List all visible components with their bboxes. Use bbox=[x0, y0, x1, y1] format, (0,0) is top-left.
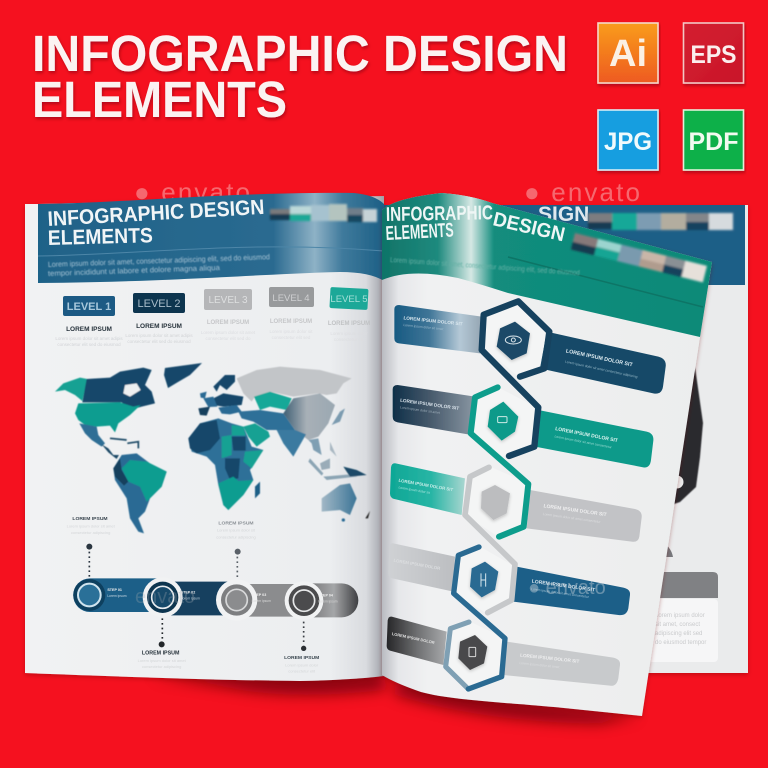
row 2: left bar: Lorem ipsum dolor sit amet bbox=[400, 405, 440, 415]
icon: PDF format badge: PDF bbox=[688, 128, 738, 156]
back page: black shape bbox=[668, 367, 703, 506]
level 4 tag: Lorem ipsum dolor sit bbox=[269, 329, 313, 334]
panel: back page (right, underneath): SIGN bbox=[538, 203, 589, 226]
timeline label 2: LOREM IPSUM bbox=[142, 651, 180, 657]
back page: grey box bbox=[655, 572, 718, 598]
left page header paragraph: tempor incididunt ut labore et dolore magna aliqua bbox=[48, 263, 221, 278]
Southeast Asia bbox=[308, 408, 367, 480]
row 2: right bar bbox=[535, 410, 653, 467]
row 1: right bar bbox=[540, 332, 666, 394]
timeline stage 1: Lorem ipsum bbox=[107, 594, 127, 598]
row 3: right bar bbox=[527, 490, 642, 542]
row 1 hex ring bbox=[482, 301, 549, 456]
book shadow bbox=[150, 672, 640, 724]
front page heading: INFOGRAPHIC bbox=[386, 202, 493, 226]
row 1: left bar: Lorem ipsum dolor sit amet bbox=[403, 323, 444, 331]
timeline label 1 bbox=[67, 516, 116, 535]
row 5 hex ring bbox=[446, 622, 469, 689]
row 5: left bar: LOREM IPSUM DOLOR bbox=[391, 631, 435, 645]
left page header divider bbox=[38, 247, 384, 256]
title: INFOGRAPHIC DESIGN bbox=[32, 25, 568, 82]
back page: text card bbox=[648, 599, 718, 662]
row 2: left bar: LOREM IPSUM DOLOR SIT bbox=[400, 398, 460, 411]
Europe bbox=[198, 375, 243, 416]
row 2: right bar: LOREM IPSUM DOLOR SIT bbox=[555, 426, 618, 444]
Tasmania bbox=[342, 518, 345, 522]
level 1 tag bbox=[55, 296, 123, 347]
left page colour swatches bbox=[270, 204, 377, 222]
icon: Ai format badge: Ai bbox=[609, 33, 647, 75]
Old world bbox=[188, 367, 370, 522]
level 4 tag: LEVEL 4 bbox=[272, 293, 310, 304]
panel: left page bbox=[25, 193, 384, 681]
China bbox=[283, 393, 335, 440]
row 3: right bar: Lorem ipsum dolor sit amet consectetur bbox=[543, 512, 602, 524]
India bbox=[277, 430, 306, 457]
level 3 tag bbox=[201, 289, 256, 341]
icon: screen hexagon bbox=[488, 402, 518, 441]
row 4: right bar: Lorem ipsum dolor sit amet consectetur bbox=[531, 587, 590, 599]
row 4: left bar bbox=[388, 543, 455, 592]
back page: text card: do eiusmod tempor bbox=[655, 640, 706, 646]
Russia bbox=[237, 367, 352, 402]
front page teal header bbox=[382, 193, 712, 337]
row 3: right bar: LOREM IPSUM DOLOR SIT bbox=[543, 503, 607, 518]
level 5 tag: LEVEL 5 bbox=[330, 294, 368, 305]
world map bbox=[55, 363, 370, 533]
Australia bbox=[322, 483, 357, 515]
timeline label 2 bbox=[138, 651, 187, 669]
timeline label 1: LOREM IPSUM bbox=[72, 516, 108, 522]
front page heading: DESIGN bbox=[491, 208, 567, 246]
icon: JPG format badge bbox=[598, 110, 658, 170]
left page header paragraph bbox=[48, 252, 270, 278]
Kazakhstan bbox=[254, 392, 292, 410]
timeline stage 2: Lorem ipsum bbox=[181, 596, 200, 600]
timeline connector 4 bbox=[301, 622, 306, 651]
timeline stage 3: Lorem ipsum bbox=[252, 599, 271, 603]
row 1: right bar: LOREM IPSUM DOLOR SIT bbox=[565, 348, 634, 369]
row 4: left bar: LOREM IPSUM DOLOR bbox=[393, 558, 442, 571]
row 4: right bar bbox=[513, 567, 630, 615]
row 2: left bar bbox=[393, 385, 475, 435]
row 2: right bar: Lorem ipsum dolor sit amet consectetur bbox=[554, 434, 613, 450]
New Zealand bbox=[365, 511, 370, 518]
level 3 tag: LEVEL 3 bbox=[208, 295, 248, 306]
timeline stage 4: Lorem ipsum bbox=[318, 600, 338, 604]
icon: grey hexagon bbox=[481, 485, 510, 520]
level 3 tag: LOREM IPSUM bbox=[207, 320, 249, 326]
icon: clipboard hexagon bbox=[458, 635, 487, 670]
icon: EPS format badge: EPS bbox=[690, 41, 736, 69]
row 1: right bar: Lorem ipsum dolor sit amet consectetur adipiscing bbox=[565, 360, 638, 379]
level 5 tag: consectetur elit bbox=[334, 337, 365, 342]
row 4: right bar: LOREM IPSUM DOLOR SIT bbox=[531, 579, 595, 594]
timeline label 4: consectetur elit bbox=[288, 669, 316, 674]
timeline label 4: LOREM IPSUM bbox=[284, 655, 319, 661]
watermark: envato top right: ● envato bbox=[524, 177, 640, 207]
colour swatches on back page bbox=[588, 213, 733, 230]
timeline label 4: Lorem ipsum dolor bbox=[285, 663, 319, 668]
timeline label 2: consectetur adipiscing bbox=[142, 664, 181, 669]
panel: front folded page bbox=[382, 193, 712, 716]
row 3 hex ring bbox=[465, 467, 515, 613]
timeline label 3 bbox=[216, 520, 256, 539]
back page: text card: Lorem ipsum dolor bbox=[655, 613, 705, 619]
timeline stage 1: STEP 01 bbox=[107, 588, 122, 592]
timeline stage 3 bbox=[216, 579, 297, 621]
level 3 tag: consectetur elit sed do bbox=[205, 336, 251, 341]
left page header heading: INFOGRAPHIC DESIGN bbox=[47, 196, 265, 231]
hexagon plates bbox=[445, 302, 547, 690]
watermark: envato top left: ● envato bbox=[134, 177, 250, 207]
level 1 tag: LEVEL 1 bbox=[67, 301, 111, 313]
level 5 tag: Lorem ipsum dolor bbox=[330, 331, 368, 336]
left page header heading: ELEMENTS bbox=[48, 224, 153, 250]
timeline connector 2 bbox=[159, 618, 165, 647]
front page heading: ELEMENTS bbox=[385, 219, 454, 245]
timeline label 3: LOREM IPSUM bbox=[218, 520, 254, 526]
front page header paragraph: Lorem ipsum dolor sit amet, consectetur adipiscing elit, sed do eiusmod bbox=[390, 257, 580, 277]
row 1: left bar: LOREM IPSUM DOLOR SIT bbox=[403, 315, 463, 327]
front page heading bbox=[385, 202, 567, 246]
level 4 tag: consectetur elit sed bbox=[272, 335, 311, 340]
timeline stage 1 bbox=[73, 578, 157, 612]
level 2 tag bbox=[125, 293, 193, 344]
row 5: right bar bbox=[503, 642, 620, 686]
level 5 tag: LOREM IPSUM bbox=[328, 321, 370, 327]
row 5: right bar: Lorem ipsum dolor sit amet bbox=[519, 661, 560, 669]
back page: white ring bbox=[669, 474, 685, 490]
timeline label 3: Lorem ipsum dolor sit bbox=[217, 528, 256, 533]
row 3: left bar: LOREM IPSUM DOLOR SIT bbox=[398, 478, 454, 492]
row 3: left bar: Lorem ipsum dolor sit bbox=[398, 485, 430, 495]
timeline label 4 bbox=[284, 655, 319, 674]
level 1 tag: LOREM IPSUM bbox=[66, 326, 112, 333]
Greenland bbox=[164, 363, 202, 388]
Middle East and Central Asia bbox=[238, 410, 295, 430]
icon: Ai format badge bbox=[598, 23, 658, 83]
back page: text card: adipiscing elit sed bbox=[655, 631, 702, 637]
row 5: left bar bbox=[387, 617, 447, 665]
timeline label 1: Lorem ipsum dolor sit amet bbox=[67, 523, 116, 528]
timeline bbox=[67, 516, 358, 674]
icon: eye hexagon bbox=[497, 322, 530, 360]
back page: text card: sit amet, consect bbox=[655, 622, 700, 628]
level 3 tag: Lorem ipsum dolor sit amet bbox=[201, 330, 256, 335]
watermark: envato timeline: envato bbox=[135, 586, 195, 608]
level 2 tag: LOREM IPSUM bbox=[136, 323, 182, 330]
row 4 hex ring bbox=[454, 547, 505, 689]
level 2 tag: Lorem ipsum dolor sit amet adipis bbox=[125, 333, 193, 338]
row 3: left bar bbox=[390, 463, 465, 515]
level 5 tag bbox=[328, 287, 370, 342]
infographic chain bbox=[387, 301, 666, 690]
timeline stage 3: STEP 03 bbox=[252, 593, 266, 597]
Arabia bbox=[243, 423, 270, 447]
title bbox=[32, 25, 568, 128]
row 2 hex ring bbox=[471, 387, 528, 537]
row 5: right bar: LOREM IPSUM DOLOR SIT bbox=[520, 653, 580, 664]
level 2 tag: LEVEL 2 bbox=[137, 298, 181, 310]
icon: building hexagon bbox=[470, 562, 498, 597]
front header fold line bbox=[508, 257, 703, 307]
timeline label 2: Lorem ipsum dolor sit amet bbox=[138, 658, 187, 663]
panel: back page (right, underneath) bbox=[380, 203, 748, 673]
icon: PDF format badge bbox=[684, 110, 744, 170]
level 1 tag: Lorem ipsum dolor sit amet adipis bbox=[55, 336, 123, 341]
timeline stage 2: STEP 02 bbox=[181, 590, 195, 594]
timeline stage 4: STEP 04 bbox=[318, 594, 334, 598]
watermark: envato lower right: ● envato bbox=[528, 577, 606, 599]
icon: EPS format badge bbox=[684, 23, 744, 83]
back page: small grey arc bbox=[660, 541, 673, 557]
level 4 tag: LOREM IPSUM bbox=[270, 319, 312, 325]
title: ELEMENTS bbox=[32, 71, 287, 128]
front page colour swatches bbox=[571, 233, 707, 282]
Americas bbox=[55, 368, 167, 533]
row 1: left bar bbox=[394, 305, 482, 353]
left page header band bbox=[38, 193, 384, 283]
timeline stage 4 bbox=[285, 581, 358, 620]
timeline connector 3 bbox=[235, 549, 241, 578]
timeline label 3: consectetur adipiscing bbox=[216, 534, 256, 539]
level 4 tag bbox=[269, 287, 314, 340]
icon: JPG format badge: JPG bbox=[604, 128, 652, 156]
Africa bbox=[188, 418, 263, 510]
timeline label 1: consectetur adipiscing bbox=[71, 530, 110, 535]
timeline connector 1 bbox=[86, 544, 92, 577]
left page header heading bbox=[47, 196, 265, 250]
level 2 tag: consectetur elit sed do eiusmod bbox=[127, 339, 191, 344]
left page header paragraph: Lorem ipsum dolor sit amet, consectetur adipiscing elit, sed do eiusmod bbox=[48, 252, 270, 269]
level 1 tag: consectetur elit sed do eiusmod bbox=[57, 342, 121, 347]
timeline stage 2 bbox=[143, 577, 230, 617]
